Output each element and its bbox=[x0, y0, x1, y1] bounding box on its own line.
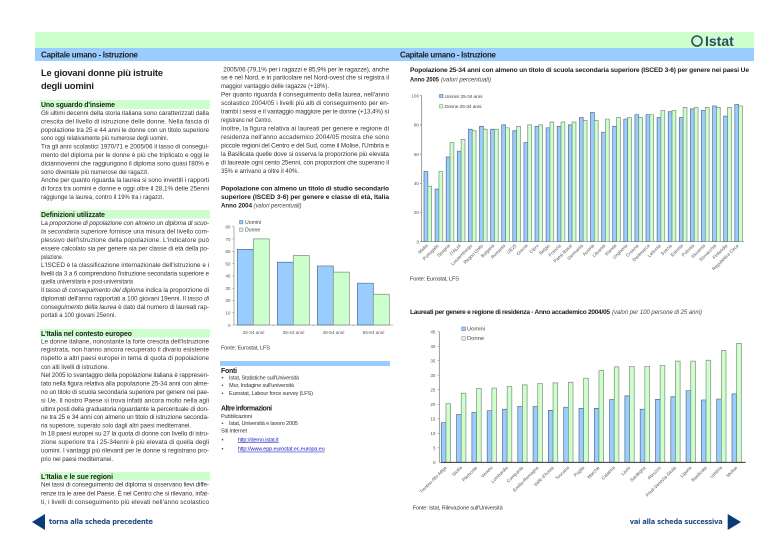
panel: sources: • bbox=[222, 391, 224, 397]
panel: further information bbox=[221, 406, 325, 453]
bar chart: EU countries: Belgio bbox=[538, 243, 551, 256]
text block: Uno sguardo d'insieme: diciannovenni che raggiungono il diploma sono quasi l'80% e bbox=[41, 160, 209, 167]
bar chart: gender and age, Italy 2004: 40 bbox=[225, 274, 231, 279]
bar chart: Italian regions: Basilicata bbox=[690, 465, 708, 483]
chart title: population by gender and age: (valori percentuali) bbox=[254, 202, 302, 209]
text block: L'Italia nel contesto europeo: zione superiore tra i 25-34enni è più elevata di quella degli bbox=[41, 439, 209, 446]
section heading band: L'Italia e le sue regioni: L'Italia e le sue regioni bbox=[41, 474, 113, 481]
bar chart: Italian regions: Valle d'Aosta bbox=[533, 465, 555, 487]
text block: Uno sguardo d'insieme: mento del diploma per le donne è più che triplicato e oggi le bbox=[41, 152, 209, 159]
bar chart: EU countries: Germania bbox=[566, 243, 584, 261]
bar chart: EU countries: Paesi Bassi bbox=[552, 243, 573, 264]
chart title: population 25-34 in EU countries: (valori percentuali) bbox=[441, 76, 491, 84]
text block: L'Italia nel contesto europeo: In 18 paesi europei su 27 la quota di donne con livello di istru- bbox=[41, 431, 209, 438]
bar chart: gender and age, Italy 2004: 30 bbox=[225, 286, 231, 291]
bar chart: EU countries: 60 bbox=[414, 152, 419, 157]
navigation: previous sheet bbox=[32, 514, 154, 530]
text block: Definizioni utilizzate: conseguimento della laurea è dato dal numero di laureati rap- bbox=[41, 304, 209, 311]
bar chart: EU countries: UE25 bbox=[506, 243, 518, 255]
text block: second column continuation: Inoltre, la figura relativa ai laureati per genere e regione di bbox=[221, 126, 389, 132]
bar chart: Italian regions: Trentino-Alto Adige bbox=[419, 465, 448, 494]
navigation: next sheet bbox=[630, 514, 741, 530]
text block: second column continuation: maggior vantaggio delle ragazze (+18%). bbox=[221, 83, 329, 90]
sources panel band bbox=[220, 361, 390, 366]
bar chart: EU countries: Francia bbox=[548, 243, 562, 258]
text block: Definizioni utilizzate bbox=[41, 220, 210, 319]
bar chart: gender and age, Italy 2004: Donne bbox=[245, 228, 260, 234]
text block: Definizioni utilizzate: Il tasso di conseguimento del diploma indica la proporzione di bbox=[41, 287, 209, 294]
bar chart: EU countries: 40 bbox=[414, 181, 419, 186]
logo: Istat: Istat bbox=[705, 33, 734, 49]
text block: second column continuation: registrano nel Centro. bbox=[221, 117, 272, 124]
text block: L'Italia nel contesto europeo: prio nei paesi mediterranei. bbox=[41, 456, 113, 463]
text block: Uno sguardo d'insieme bbox=[41, 110, 209, 201]
text block: second column continuation: 35% e arrivano a oltre il 40%. bbox=[221, 168, 299, 175]
bar chart: gender and age, Italy 2004: 10 bbox=[225, 310, 231, 316]
bar chart: Italian regions: 15 bbox=[430, 416, 436, 422]
bar chart: gender and age, Italy 2004: 60 bbox=[225, 249, 231, 254]
top green band bbox=[35, 32, 754, 48]
text block: Definizioni utilizzate: diplomati dell'anno rapportati a 100 giovani 19enni. Il tasso di bbox=[41, 295, 210, 302]
bar chart: EU countries: ITALIA bbox=[449, 243, 463, 256]
text block: second column continuation: Per quanto riguarda il conseguimento della laurea, nell'anno bbox=[221, 92, 389, 99]
main title: Le giovani donne più istruite bbox=[41, 67, 163, 78]
text block: Definizioni utilizzate: la secondaria superiore fornisce una misura del livello com- bbox=[41, 229, 209, 236]
bar chart: Italian regions: Sicilia bbox=[451, 465, 463, 477]
bar chart: Italian regions: 45 bbox=[430, 329, 436, 334]
bar chart: Italian regions: Abruzzo bbox=[646, 465, 662, 481]
main title: degli uomini bbox=[41, 80, 94, 91]
text block: second column continuation: la Basilicata quelle dove si osserva la proporzione più elevata bbox=[221, 151, 389, 158]
text block: L'Italia nel contesto europeo: con alti livelli di istruzione. bbox=[41, 364, 109, 371]
bar chart: EU countries: Cipro bbox=[528, 243, 540, 254]
bar chart: EU countries: Uomini 25-34 anni bbox=[444, 94, 482, 100]
chart title: population by gender and age: superiore (ISCED 3-6) per genere e classe di età, Italia bbox=[221, 194, 389, 201]
text block: Uno sguardo d'insieme: sono diventate più numerose dei ragazzi. bbox=[41, 169, 149, 176]
bar chart: EU countries: Romania bbox=[490, 243, 507, 260]
panel: further information: Pubblicazioni bbox=[221, 414, 252, 420]
bar chart: Italian regions: Campania bbox=[506, 465, 525, 484]
bar chart: EU countries: Donne 25-34 anni bbox=[444, 104, 482, 110]
bar chart: Italian regions: Toscana bbox=[554, 465, 570, 481]
bar chart: EU countries: Repubblica Ceca bbox=[711, 243, 740, 271]
text block: Uno sguardo d'insieme: Tra gli anni scolastici 1970/71 e 2005/06 il tasso di consegui- bbox=[41, 144, 209, 151]
source note: chart 3: Fonte: Istat, Rilevazione sull'Università bbox=[413, 506, 504, 512]
bar chart: EU countries: Ungheria bbox=[612, 243, 629, 260]
bar chart: EU countries: Croazia bbox=[625, 243, 640, 258]
text block: L'Italia e le sue regioni: ti, i livelli di conseguimento più elevati nell'anno scolastico bbox=[41, 499, 209, 506]
text block: Definizioni utilizzate: La proporzione di popolazione con almeno un diploma di scuo- bbox=[41, 220, 209, 227]
header: left section: Capitale umano - Istruzione bbox=[41, 50, 139, 59]
bar chart: EU countries: Slovenia bbox=[690, 243, 707, 259]
bar chart: EU countries: Lettonia bbox=[647, 243, 662, 258]
text block: Definizioni utilizzate: livelli da 3 a 6 comprendono l'istruzione secondaria superiore e bbox=[41, 270, 209, 277]
text block: L'Italia nel contesto europeo: registrata, non hanno ancora recuperato il divario esistente bbox=[41, 347, 209, 354]
source note: chart 1: Fonte: Eurostat, LFS bbox=[221, 346, 270, 352]
bar chart: EU countries: 20 bbox=[414, 210, 419, 215]
header: right section: Capitale umano - Istruzione bbox=[400, 50, 497, 59]
text block: Uno sguardo d'insieme: popolazione tra 25 e 44 anni le donne con un titolo superiore bbox=[41, 127, 209, 134]
chart title: population 25-34 in EU countries bbox=[410, 67, 749, 84]
panel: sources: • bbox=[222, 383, 224, 389]
text block: L'Italia nel contesto europeo: ultimi posti della graduatoria riguardante la percentuale di don- bbox=[41, 406, 209, 413]
panel: further information: http://www.epp.eurostat.ec.europa.eu bbox=[238, 447, 325, 453]
text block: second column continuation: piccole regioni del Centro e del Sud, come il Molise, l'Umbria e bbox=[221, 142, 389, 149]
bar chart: Italian regions: Lazio bbox=[620, 465, 632, 476]
text block: L'Italia nel contesto europeo: Le donne italiane, nonostante la forte crescita dell'istruzione bbox=[41, 338, 209, 345]
bar chart: EU countries: Portogallo bbox=[422, 243, 440, 261]
panel: sources bbox=[221, 368, 313, 397]
text block: Definizioni utilizzate: quella universitaria e post-universitaria bbox=[41, 279, 133, 286]
panel: sources: Fonti bbox=[221, 368, 237, 375]
bar chart: EU countries: 100 bbox=[411, 93, 419, 98]
bar chart: EU countries: Polonia bbox=[681, 243, 695, 258]
bar chart: gender and age, Italy 2004: 20 bbox=[225, 298, 231, 303]
text block: Definizioni utilizzate: essere calcolato sia per genere sia per classe di età della po- bbox=[41, 245, 209, 252]
chart title: population 25-34 in EU countries: Anno 2005 bbox=[410, 76, 439, 84]
section heading band: L'Italia nel contesto europeo bbox=[40, 329, 210, 338]
bar chart: EU countries: 80 bbox=[414, 123, 419, 128]
panel: sources: Mur, Indagine sull'università bbox=[229, 383, 295, 389]
panel: sources: Eurostat, Labour force survey (LFS) bbox=[229, 391, 313, 397]
bar chart: Italian regions: 40 bbox=[430, 344, 436, 349]
text block: L'Italia e le sue regioni: Nei tassi di conseguimento del diploma si osservano lievi diffe- bbox=[41, 482, 209, 489]
panel: further information: • bbox=[222, 447, 224, 453]
bar chart: EU countries: Lussemburgo bbox=[450, 243, 473, 266]
source note: chart 2: Fonte: Eurostat, LFS bbox=[410, 276, 459, 282]
bar chart: Italian regions: Lombardia bbox=[490, 465, 509, 484]
bar chart: EU countries: Grecia bbox=[516, 243, 529, 256]
panel: further information: • bbox=[222, 437, 224, 443]
chart title: population by gender and age: Anno 2004 bbox=[221, 202, 252, 209]
bar chart: Italian regions: Veneto bbox=[480, 465, 494, 479]
bar chart: gender and age, Italy 2004: 80 bbox=[225, 224, 231, 230]
text block: L'Italia nel contesto europeo: ria superiore, superato solo dagli altri paesi mediterranei. bbox=[41, 422, 191, 429]
text block: L'Italia nel contesto europeo: si Ue. Il nostro Paese si trova infatti ancora molto nella agli bbox=[41, 398, 209, 404]
text block: second column continuation bbox=[221, 66, 389, 175]
bar chart: Italian regions: Uomini bbox=[467, 326, 485, 332]
bar chart: EU countries: Lituania bbox=[591, 243, 607, 258]
panel: sources: • bbox=[222, 376, 224, 382]
text block: L'Italia nel contesto europeo: Nel 2005 lo svantaggio della popolazione italiana è rappresen- bbox=[41, 372, 209, 379]
bar chart: Italian regions: Sardegna bbox=[629, 465, 647, 483]
panel: further information: • bbox=[222, 421, 224, 427]
bar chart: Italian regions bbox=[419, 326, 746, 498]
chart title: population 25-34 in EU countries: Popolazione 25-34 anni con almeno un titolo di scuola secondaria superiore (ISCED 3-6) per genere nei paesi Ue bbox=[410, 67, 749, 74]
section heading band: Uno sguardo d'insieme: Uno sguardo d'insieme bbox=[41, 102, 115, 109]
main title bbox=[41, 67, 163, 91]
bar chart: Italian regions: Marche bbox=[586, 465, 601, 480]
section heading band: Definizioni utilizzate bbox=[40, 210, 210, 219]
chart title: population by gender and age: Popolazione con almeno un titolo di studio secondario bbox=[221, 186, 389, 192]
text block: L'Italia nel contesto europeo: uomini. I vantaggi più rilevanti per le donne si registrano pro- bbox=[41, 448, 209, 455]
bar chart: gender and age, Italy 2004: 0 bbox=[228, 323, 231, 328]
text block: Uno sguardo d'insieme: di forza tra uomini e donne e oggi oltre il 28,1% delle 25enni bbox=[41, 186, 209, 193]
bar chart: EU countries: Spagna bbox=[436, 243, 451, 258]
text block: L'Italia e le sue regioni: renze tra le aree del Paese. È nel Centro che si rilevano, infat- bbox=[41, 488, 209, 497]
section heading band: L'Italia e le sue regioni bbox=[40, 472, 210, 481]
bar chart: gender and age, Italy 2004: 55-64 anni bbox=[363, 330, 384, 335]
bar chart: Italian regions: 30 bbox=[430, 373, 436, 378]
bar chart: EU countries: 0 bbox=[416, 239, 419, 244]
bar chart: gender and age, Italy 2004: 70 bbox=[225, 237, 231, 242]
bar chart: gender and age, Italy 2004: 25-34 anni bbox=[243, 330, 264, 335]
bar chart: Italian regions: Friuli-Venezia Giulia bbox=[645, 465, 678, 498]
navigation: previous sheet: torna alla scheda precedente bbox=[49, 518, 154, 526]
panel: further information: http://demo.istat.it bbox=[238, 437, 279, 443]
text block: Definizioni utilizzate: L'ISCED è la classificazione internazionale dell'istruzione e i bbox=[41, 262, 209, 269]
bar chart: EU countries: Regno Unito bbox=[463, 243, 485, 265]
bar chart: EU countries: Finlandia bbox=[712, 243, 729, 260]
bar chart: EU countries: Estonia bbox=[670, 243, 684, 258]
bar chart: gender and age, Italy 2004: Uomini bbox=[245, 220, 261, 226]
text block: Uno sguardo d'insieme: crescita del livello di istruzione delle donne. Nella fascia di bbox=[41, 118, 209, 125]
bar chart: Italian regions: Piemonte bbox=[461, 465, 479, 482]
text block: second column continuation: 2005/06 (79,1% per i ragazzi e 85,9% per le ragazze), anche bbox=[223, 66, 389, 73]
logo: Istat bbox=[692, 33, 734, 49]
chart title: graduates by gender and region: (valori per 100 persone di 25 anni) bbox=[612, 309, 702, 316]
bar chart: Italian regions: 10 bbox=[430, 431, 436, 436]
bar chart: EU countries: Malta bbox=[417, 243, 429, 255]
text block: Uno sguardo d'insieme: raggiunge la laurea, contro il 19% tra i ragazzi. bbox=[41, 194, 164, 201]
bar chart: EU countries: Irlanda bbox=[604, 243, 618, 257]
bar chart: Italian regions: Liguria bbox=[679, 465, 693, 478]
text block: Uno sguardo d'insieme: Anche per quanto riguarda la laurea si sono invertiti i rapporti bbox=[41, 177, 209, 184]
top blue band bbox=[35, 48, 754, 61]
panel: further information: Istat, Università e lavoro 2005 bbox=[229, 421, 298, 427]
text block: second column continuation: trambi i sessi e il vantaggio maggiore per le donne (+13,4%) si bbox=[221, 109, 389, 116]
text block: second column continuation: scolastico 2004/05 i livelli più alti di conseguimento per en- bbox=[221, 100, 389, 107]
bar chart: Italian regions: Umbria bbox=[709, 465, 723, 479]
panel: further information: Siti Internet bbox=[221, 428, 247, 434]
bar chart: gender and age, Italy 2004: 45-54 anni bbox=[323, 330, 344, 335]
text block: Definizioni utilizzate: polazione. bbox=[41, 254, 63, 261]
text block: Uno sguardo d'insieme: Gli ultimi decenni della storia italiana sono caratterizzati dalla bbox=[41, 110, 209, 117]
bar chart: Italian regions: 5 bbox=[433, 446, 436, 450]
text block: Uno sguardo d'insieme: sono oggi relativamente più numerose degli uomini. bbox=[41, 135, 168, 142]
text block: second column continuation: se è nel Nord, e in particolare nel Nord-ovest che si registra il bbox=[221, 75, 389, 82]
text block: Definizioni utilizzate: plessivo dell'istruzione della popolazione. L'indicatore può bbox=[41, 237, 209, 244]
text block: second column continuation: di laureate ogni cento 25enni, con proporzioni che superano il bbox=[221, 159, 389, 166]
text block: L'Italia nel contesto europeo bbox=[41, 338, 209, 463]
text block: L'Italia nel contesto europeo: no un titolo di scuola secondaria superiore per genere nei pae- bbox=[41, 389, 209, 396]
chart title: graduates by gender and region: Laureati per genere e regione di residenza - Anno accademico 2004/05 bbox=[410, 309, 610, 316]
bar chart: EU countries: Danimarca bbox=[631, 243, 651, 262]
text block: L'Italia nel contesto europeo: rispetto a altri paesi europei in tema di quota di popolazione bbox=[41, 355, 209, 362]
text block: Definizioni utilizzate: portati a 100 giovani 25enni. bbox=[41, 312, 116, 319]
bar chart: Italian regions: Donne bbox=[467, 336, 484, 342]
bar chart: gender and age, Italy 2004: 35-44 anni bbox=[283, 330, 304, 335]
bar chart: EU countries: Austria bbox=[582, 243, 596, 257]
section heading band: Definizioni utilizzate: Definizioni utilizzate bbox=[41, 212, 105, 219]
text block: second column continuation: residenza nell'anno accademico 2004/05 mostra che sono bbox=[221, 134, 389, 141]
chart title: graduates by gender and region bbox=[410, 309, 702, 316]
chart title: population by gender and age bbox=[221, 186, 389, 209]
bar chart: Italian regions: 25 bbox=[430, 388, 436, 392]
bar chart: EU countries: Slovacchia bbox=[698, 243, 718, 262]
panel: further information: Altre informazioni bbox=[221, 406, 272, 412]
section heading band: L'Italia nel contesto europeo: L'Italia nel contesto europeo bbox=[41, 331, 132, 338]
bar chart: Italian regions: 35 bbox=[430, 358, 436, 363]
bar chart: Italian regions: Puglia bbox=[573, 465, 586, 478]
text block: L'Italia nel contesto europeo: tato nella figura relativa alla popolazione 25-34 anni con alme- bbox=[41, 381, 209, 388]
section heading band: Uno sguardo d'insieme bbox=[40, 100, 210, 109]
text block: L'Italia nel contesto europeo: ne tra 25 e 34 anni con almeno un titolo di istruzione seconda- bbox=[41, 414, 209, 421]
bar chart: EU countries: Svezia bbox=[660, 243, 673, 256]
bar chart: Italian regions: Emilia-Romagna bbox=[512, 465, 540, 493]
bar chart: Italian regions: 0 bbox=[433, 460, 436, 465]
bar chart: gender and age, Italy 2004 bbox=[225, 220, 393, 335]
bar chart: Italian regions: Calabria bbox=[600, 465, 616, 481]
navigation: next sheet: vai alla scheda successiva bbox=[630, 518, 723, 526]
bar chart: Italian regions: Molise bbox=[725, 465, 739, 478]
bar chart: Italian regions: 20 bbox=[430, 402, 436, 407]
bar chart: EU countries bbox=[411, 93, 744, 271]
text block: L'Italia e le sue regioni bbox=[41, 482, 209, 506]
panel: sources: Istat, Statistiche sull'Università bbox=[229, 376, 300, 382]
bar chart: gender and age, Italy 2004: 50 bbox=[225, 261, 231, 266]
bar chart: EU countries: Bulgaria bbox=[480, 243, 496, 259]
